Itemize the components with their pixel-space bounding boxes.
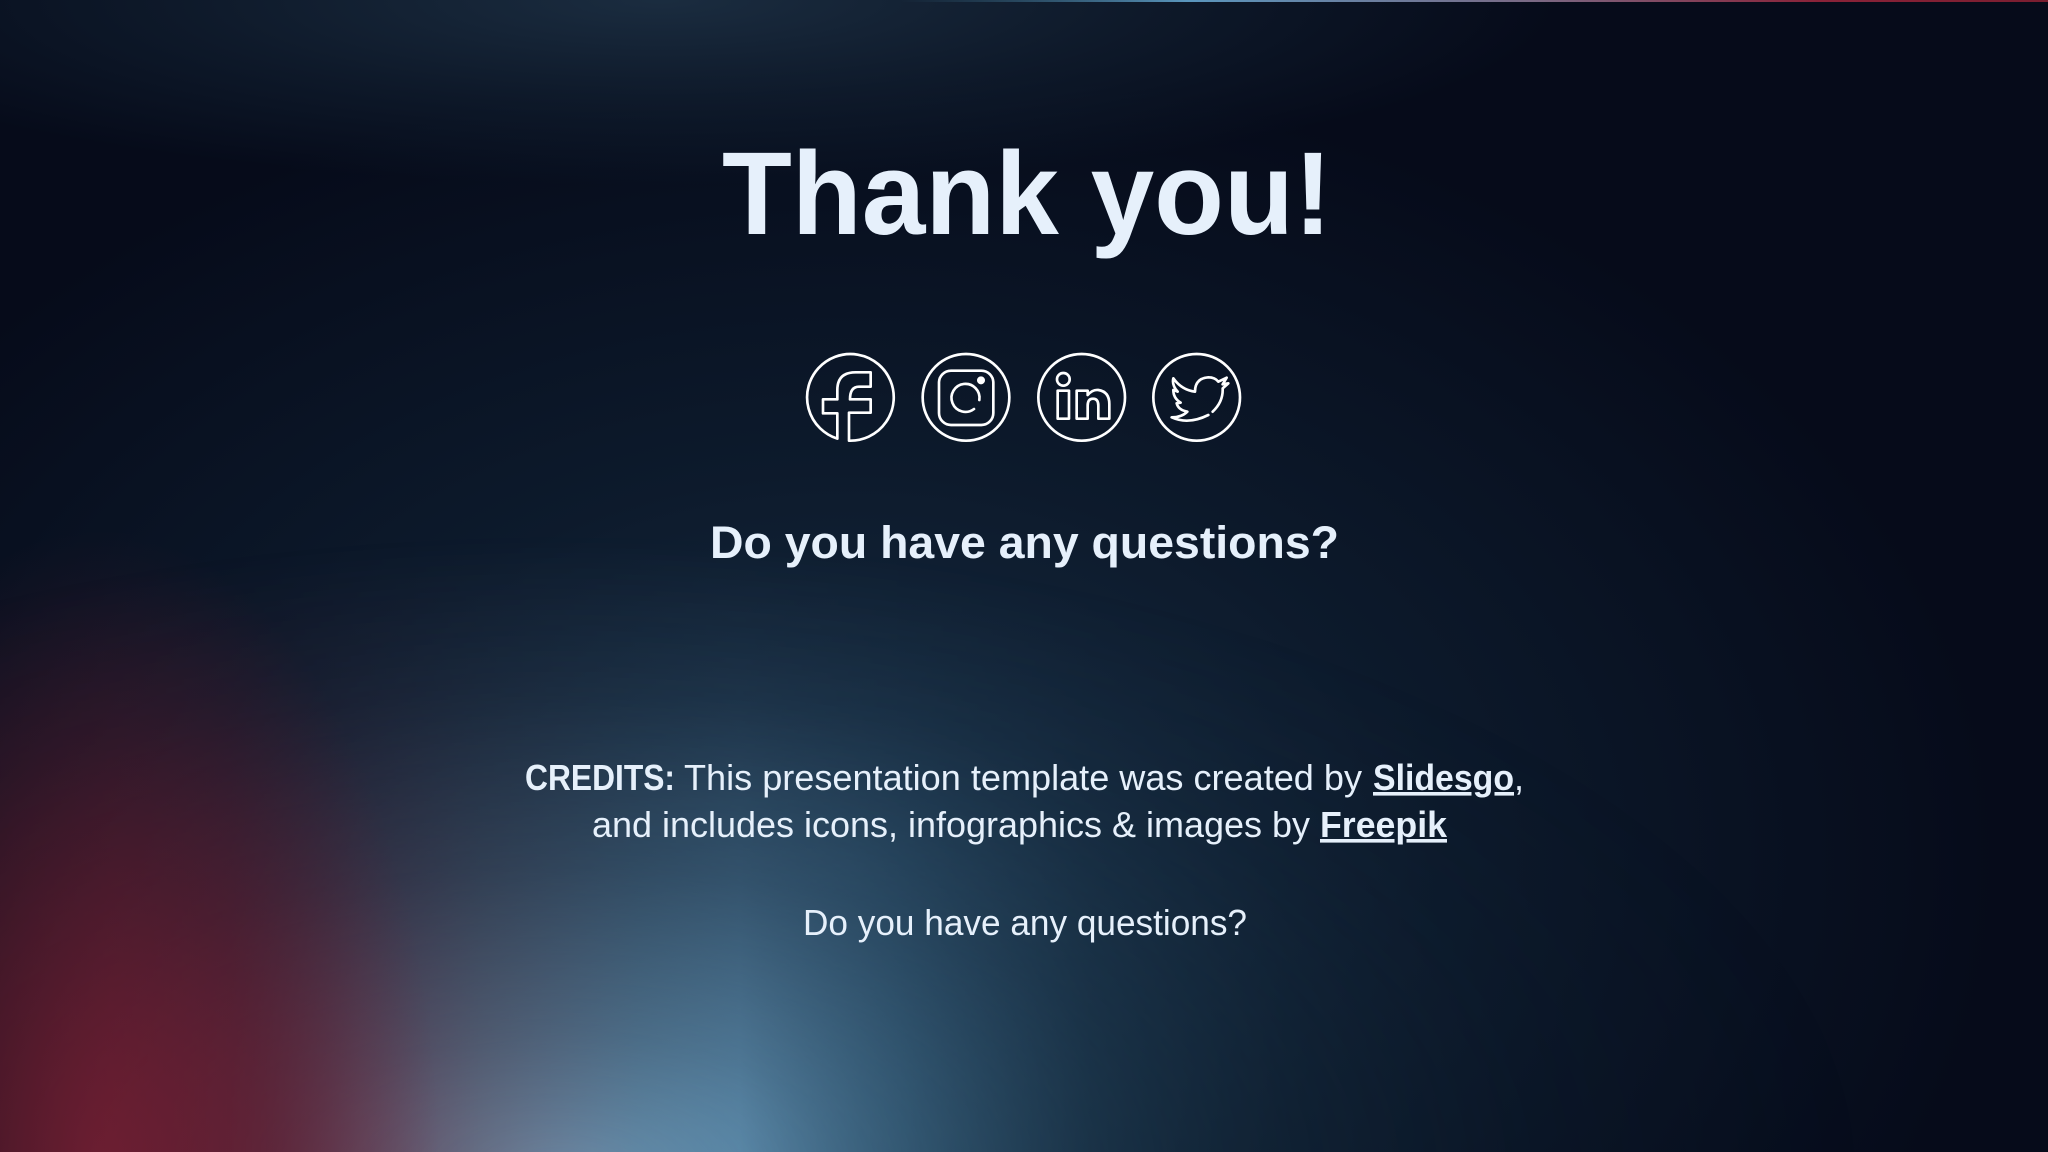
top accent line: [900, 0, 2048, 2]
social icons: [807, 354, 1240, 441]
icon: facebook: [807, 354, 894, 441]
icon: linkedin: [1038, 354, 1125, 441]
icon: instagram: [923, 354, 1009, 441]
subtitle: Do you have any questions?: [710, 517, 1339, 568]
credits line 2: Freepik: [1320, 804, 1448, 845]
icon: twitter: [1153, 354, 1240, 441]
title: Thank you!: [722, 128, 1332, 260]
credits line 1: ,: [1514, 757, 1524, 798]
credits line 1: Slidesgo: [1373, 757, 1514, 798]
credits line 1: This presentation template was created by: [684, 757, 1362, 798]
credits text: [525, 757, 1524, 845]
credits line 1: CREDITS:: [525, 757, 675, 798]
closing question: Do you have any questions?: [803, 902, 1247, 943]
credits line 2: and includes icons, infographics & images by: [592, 804, 1310, 845]
